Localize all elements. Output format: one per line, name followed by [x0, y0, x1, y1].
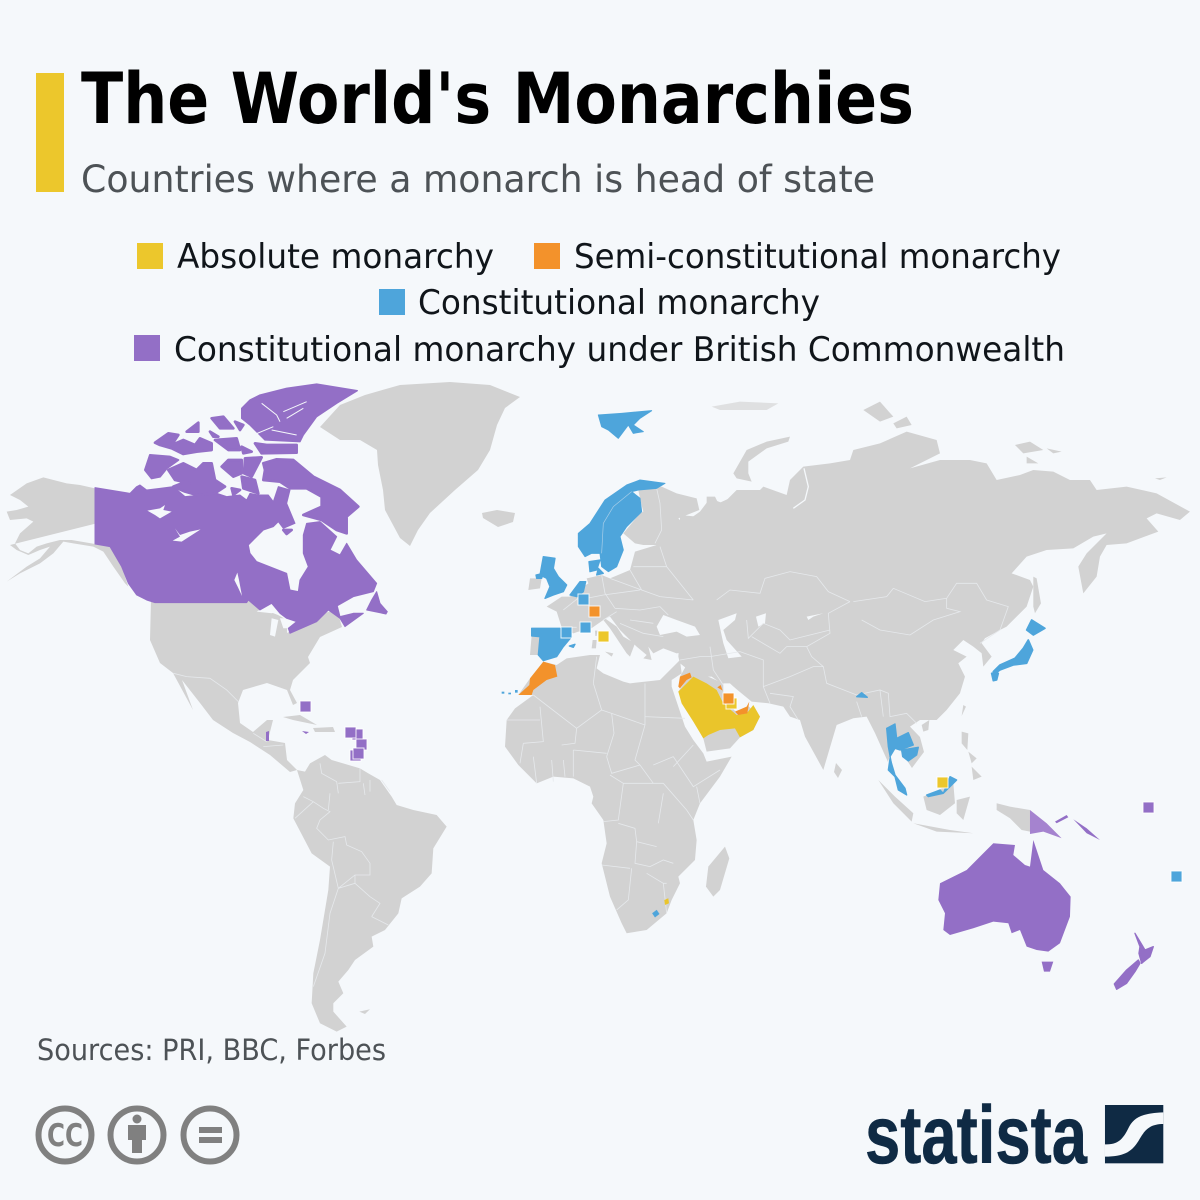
Jamaica: [302, 731, 309, 734]
USA, Mexico, Central America: [150, 600, 342, 772]
Java and Lesser Sunda: [913, 823, 973, 833]
United Arab Emirates: [735, 702, 749, 715]
title: The World's Monarchies: [81, 58, 914, 140]
Netherlands and Belgium: [570, 582, 586, 597]
Caspian, Aral and Balkhash: [718, 613, 823, 658]
Norway and Sweden: [578, 480, 665, 572]
Africa borders: [507, 657, 720, 913]
absolute monarchies: [664, 677, 760, 905]
icon: no derivatives: [184, 1108, 236, 1162]
Canary Islands: [502, 690, 518, 694]
Eswatini: [664, 898, 669, 905]
Europe borders: [562, 547, 693, 637]
Banks Island: [145, 455, 178, 478]
small-country markers: [300, 594, 1182, 882]
icon: attribution: [110, 1108, 164, 1162]
icon: CC: CC: [47, 1118, 83, 1154]
legend: semi-constitutional monarchy: Semi-constitutional monarchy: [574, 237, 1061, 277]
Ireland: [528, 578, 542, 590]
marker: Antigua: [345, 727, 356, 738]
marker: Saint Lucia: [356, 739, 367, 750]
United Kingdom: [536, 557, 567, 598]
Svalbard and Scandinavia: [578, 411, 665, 572]
Great Lakes: [257, 605, 295, 637]
Kuwait: [717, 685, 723, 691]
Svalbard: [598, 411, 652, 438]
Australia: [938, 840, 1071, 952]
country borders: [173, 488, 1008, 987]
western New Guinea: [997, 803, 1030, 832]
Africa: [505, 655, 732, 933]
Gulf of Ob: [793, 468, 808, 508]
Canadian lakes: [147, 497, 313, 596]
Persian Gulf: [723, 683, 750, 713]
Japan: [992, 620, 1045, 681]
marker: Monaco: [580, 622, 591, 633]
Canadian mainland: [95, 485, 377, 633]
marker: Andorra: [561, 627, 572, 638]
UK, Benelux, Denmark and Spain: [532, 557, 603, 661]
Creative Commons icons: [38, 1108, 236, 1162]
subtitle: Countries where a monarch is head of state: [81, 158, 875, 201]
marker: Grenada: [353, 748, 364, 759]
marker: Brunei: [937, 777, 948, 788]
inland water and seas: [257, 468, 823, 713]
world map: [7, 382, 1190, 1032]
Statista wordmark: statista: [865, 1090, 1088, 1181]
Cambodia: [902, 747, 918, 761]
legend: absolute monarchy: Absolute monarchy: [177, 237, 494, 277]
marker: Saint Vincent: [350, 750, 361, 761]
Arabian base: [678, 670, 760, 738]
Saudi Arabia and Oman: [678, 677, 760, 738]
Borneo: [923, 783, 955, 815]
Philippines: [962, 732, 982, 780]
Spain: [532, 628, 572, 661]
Malaysia peninsula: [888, 758, 907, 795]
source: Sources: PRI, BBC, Forbes: [37, 1033, 386, 1067]
Canada: [95, 384, 387, 633]
Finland and north-west Russia: [623, 487, 787, 577]
Norway-Sweden border: [602, 492, 632, 553]
icon: CC: [38, 1108, 92, 1162]
Sulawesi: [957, 797, 970, 820]
Portugal: [530, 635, 540, 655]
Caribbean islands: [283, 715, 335, 732]
Sri Lanka: [834, 763, 842, 778]
Black Sea: [657, 615, 700, 637]
Europe and Turkey: [547, 540, 720, 678]
marker: Liechtenstein: [589, 606, 600, 617]
Baffin Island: [263, 459, 358, 533]
Tasmania: [1042, 962, 1053, 972]
legend: constitutional monarchy: Constitutional monarchy: [418, 283, 820, 323]
marker: Bahamas: [300, 701, 311, 712]
Arctic fjords: [253, 402, 307, 435]
Balearic Islands: [569, 644, 575, 647]
Arctic and Pacific islands of Asia: [712, 402, 1167, 732]
marker: Vatican: [598, 631, 609, 642]
semi-constitutional monarchies: [518, 662, 749, 715]
Madagascar: [706, 847, 729, 897]
North America borders: [173, 673, 283, 747]
Alaska: [7, 477, 128, 587]
Newfoundland: [367, 592, 387, 614]
Belize: [266, 731, 269, 741]
Statista logo mark: [1105, 1105, 1163, 1163]
title accent bar: [36, 73, 64, 192]
central Arctic islands: [155, 417, 297, 534]
Greenland: [320, 382, 520, 546]
Yemen: [703, 727, 740, 752]
Commonwealth countries: [95, 384, 1153, 989]
northern and eastern Asia: [678, 432, 1190, 770]
Australia, New Zealand and Papua New Guinea: [938, 810, 1153, 989]
South America: [293, 755, 447, 1032]
Asia borders: [680, 572, 1008, 723]
New Zealand: [1114, 933, 1153, 989]
Ellesmere and Axel Heiberg Islands: [242, 384, 357, 442]
Sumatra: [878, 780, 913, 822]
marker: Saint Kitts: [352, 729, 363, 740]
Thailand: [887, 724, 913, 765]
Bhutan: [857, 693, 867, 697]
South America borders: [295, 763, 390, 987]
Papua New Guinea: [1030, 810, 1062, 838]
constitutional monarchies: [502, 411, 1045, 917]
marker: Tonga: [1171, 871, 1182, 882]
Jordan: [678, 673, 692, 688]
marker: Qatar: [726, 698, 737, 709]
Denmark: [589, 560, 603, 575]
marker: Bahrain: [723, 693, 734, 704]
grey landmasses: [7, 382, 1190, 1032]
marker: Luxembourg: [578, 594, 589, 605]
Iceland: [482, 510, 515, 527]
Victoria Island: [168, 463, 225, 495]
Solomon and Bismarck islands: [1055, 815, 1100, 840]
legend: commonwealth monarchy: Constitutional monarchy under British Commonwealth: [174, 330, 1065, 370]
legend: [134, 237, 1065, 370]
Mediterranean islands: [592, 631, 613, 657]
marker: Tuvalu: [1143, 802, 1154, 813]
Morocco: [518, 662, 557, 695]
Malaysia Borneo: [927, 777, 957, 797]
Thailand, Cambodia, Malaysia, Bhutan: [857, 693, 957, 797]
Falkland Islands: [359, 1009, 370, 1014]
Finland border: [655, 488, 662, 543]
Lesotho: [652, 910, 659, 917]
